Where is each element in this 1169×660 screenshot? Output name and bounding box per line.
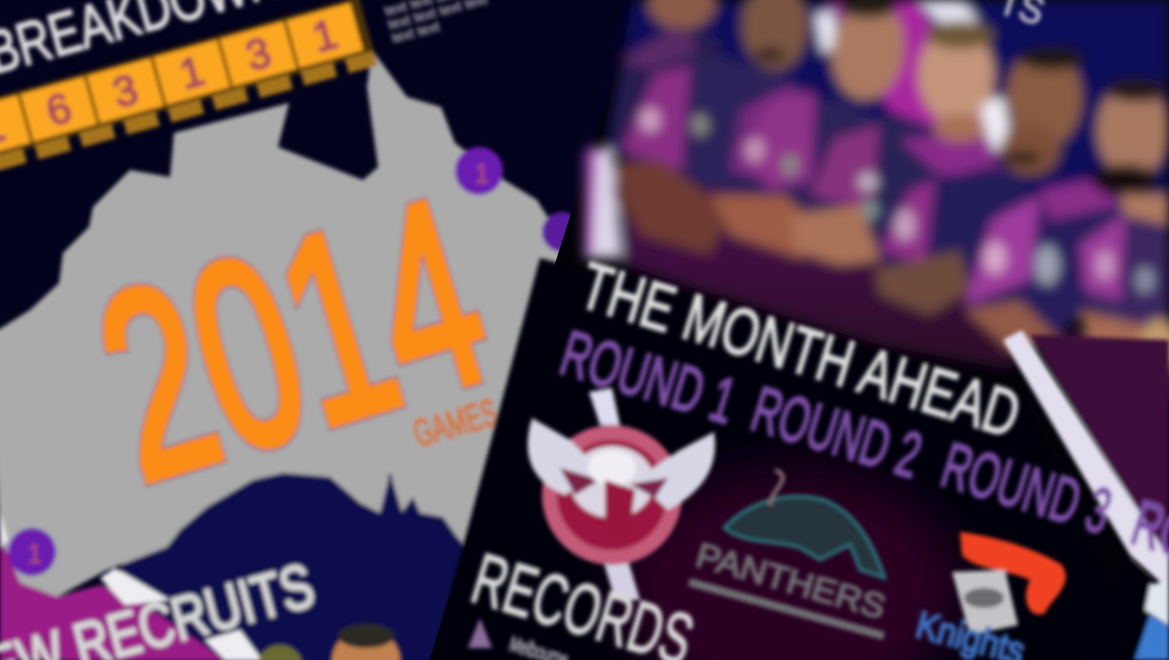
magenta backdrop stripe	[828, 0, 995, 145]
player 4	[810, 21, 1000, 260]
player 6 arm	[965, 300, 1060, 350]
stat strip: 1	[307, 10, 342, 61]
maroon glow behind logos	[620, 470, 960, 660]
marker: north-east count	[455, 147, 503, 195]
player 3	[738, 0, 911, 215]
panel: left poster	[0, 0, 582, 660]
players photo	[584, 0, 1169, 400]
player 3 arm	[712, 195, 830, 258]
player 5	[880, 46, 1085, 300]
marker: east count	[542, 212, 582, 252]
icon: next club logo	[1135, 580, 1169, 660]
small copy block	[383, 0, 518, 46]
marker: north-east count: 1	[474, 158, 490, 189]
player 5 arm	[875, 250, 970, 315]
games label: GAMES	[409, 392, 502, 456]
white stripe fragments	[589, 388, 620, 425]
icon: Panthers logo: PANTHERS	[692, 536, 890, 626]
marker: west count	[8, 528, 56, 576]
black wedge under stripe	[1080, 560, 1169, 660]
white side stripe	[584, 150, 622, 258]
map of Australia	[0, 50, 570, 597]
icon: Knights logo	[912, 532, 1066, 660]
white diagonal stripe	[1003, 330, 1169, 590]
black title band	[430, 258, 1169, 660]
white backdrop stripes	[918, 0, 978, 28]
stat strip: 3	[241, 28, 276, 80]
magenta corner	[0, 535, 225, 660]
big year figure: 2014	[70, 144, 515, 537]
stat strip: 1	[174, 47, 209, 98]
navy backdrop	[605, 0, 1169, 320]
player 2 arm	[612, 160, 730, 255]
stat strip	[0, 0, 376, 189]
label band	[0, 58, 376, 189]
magenta side stripe	[584, 145, 598, 258]
player 2	[622, 0, 820, 190]
rounds list: ROUND 1	[553, 317, 744, 437]
icon: Manly eagle logo	[528, 418, 715, 565]
icon: small club crest	[468, 618, 492, 648]
dark lower jerseys	[620, 180, 1040, 370]
recruit heads	[258, 624, 400, 660]
rounds list: ROUND 2	[744, 373, 929, 492]
big year figure	[70, 144, 515, 537]
stat strip: 6	[41, 83, 76, 135]
rounds list	[553, 317, 1169, 573]
stat strip: 3	[108, 65, 143, 117]
player 6	[965, 78, 1169, 340]
navy background lower	[60, 460, 480, 660]
white stripes	[100, 568, 170, 605]
icon: Panthers logo	[688, 470, 890, 640]
player 7	[1080, 195, 1169, 340]
marker: west count: 1	[27, 538, 43, 569]
big year figure: 2014	[70, 144, 515, 537]
player 1	[610, 0, 720, 224]
player 4 arm	[790, 205, 880, 265]
right maroon wedge	[1030, 335, 1169, 560]
panel: right poster	[428, 0, 1169, 660]
small copy block: text text	[390, 18, 441, 46]
